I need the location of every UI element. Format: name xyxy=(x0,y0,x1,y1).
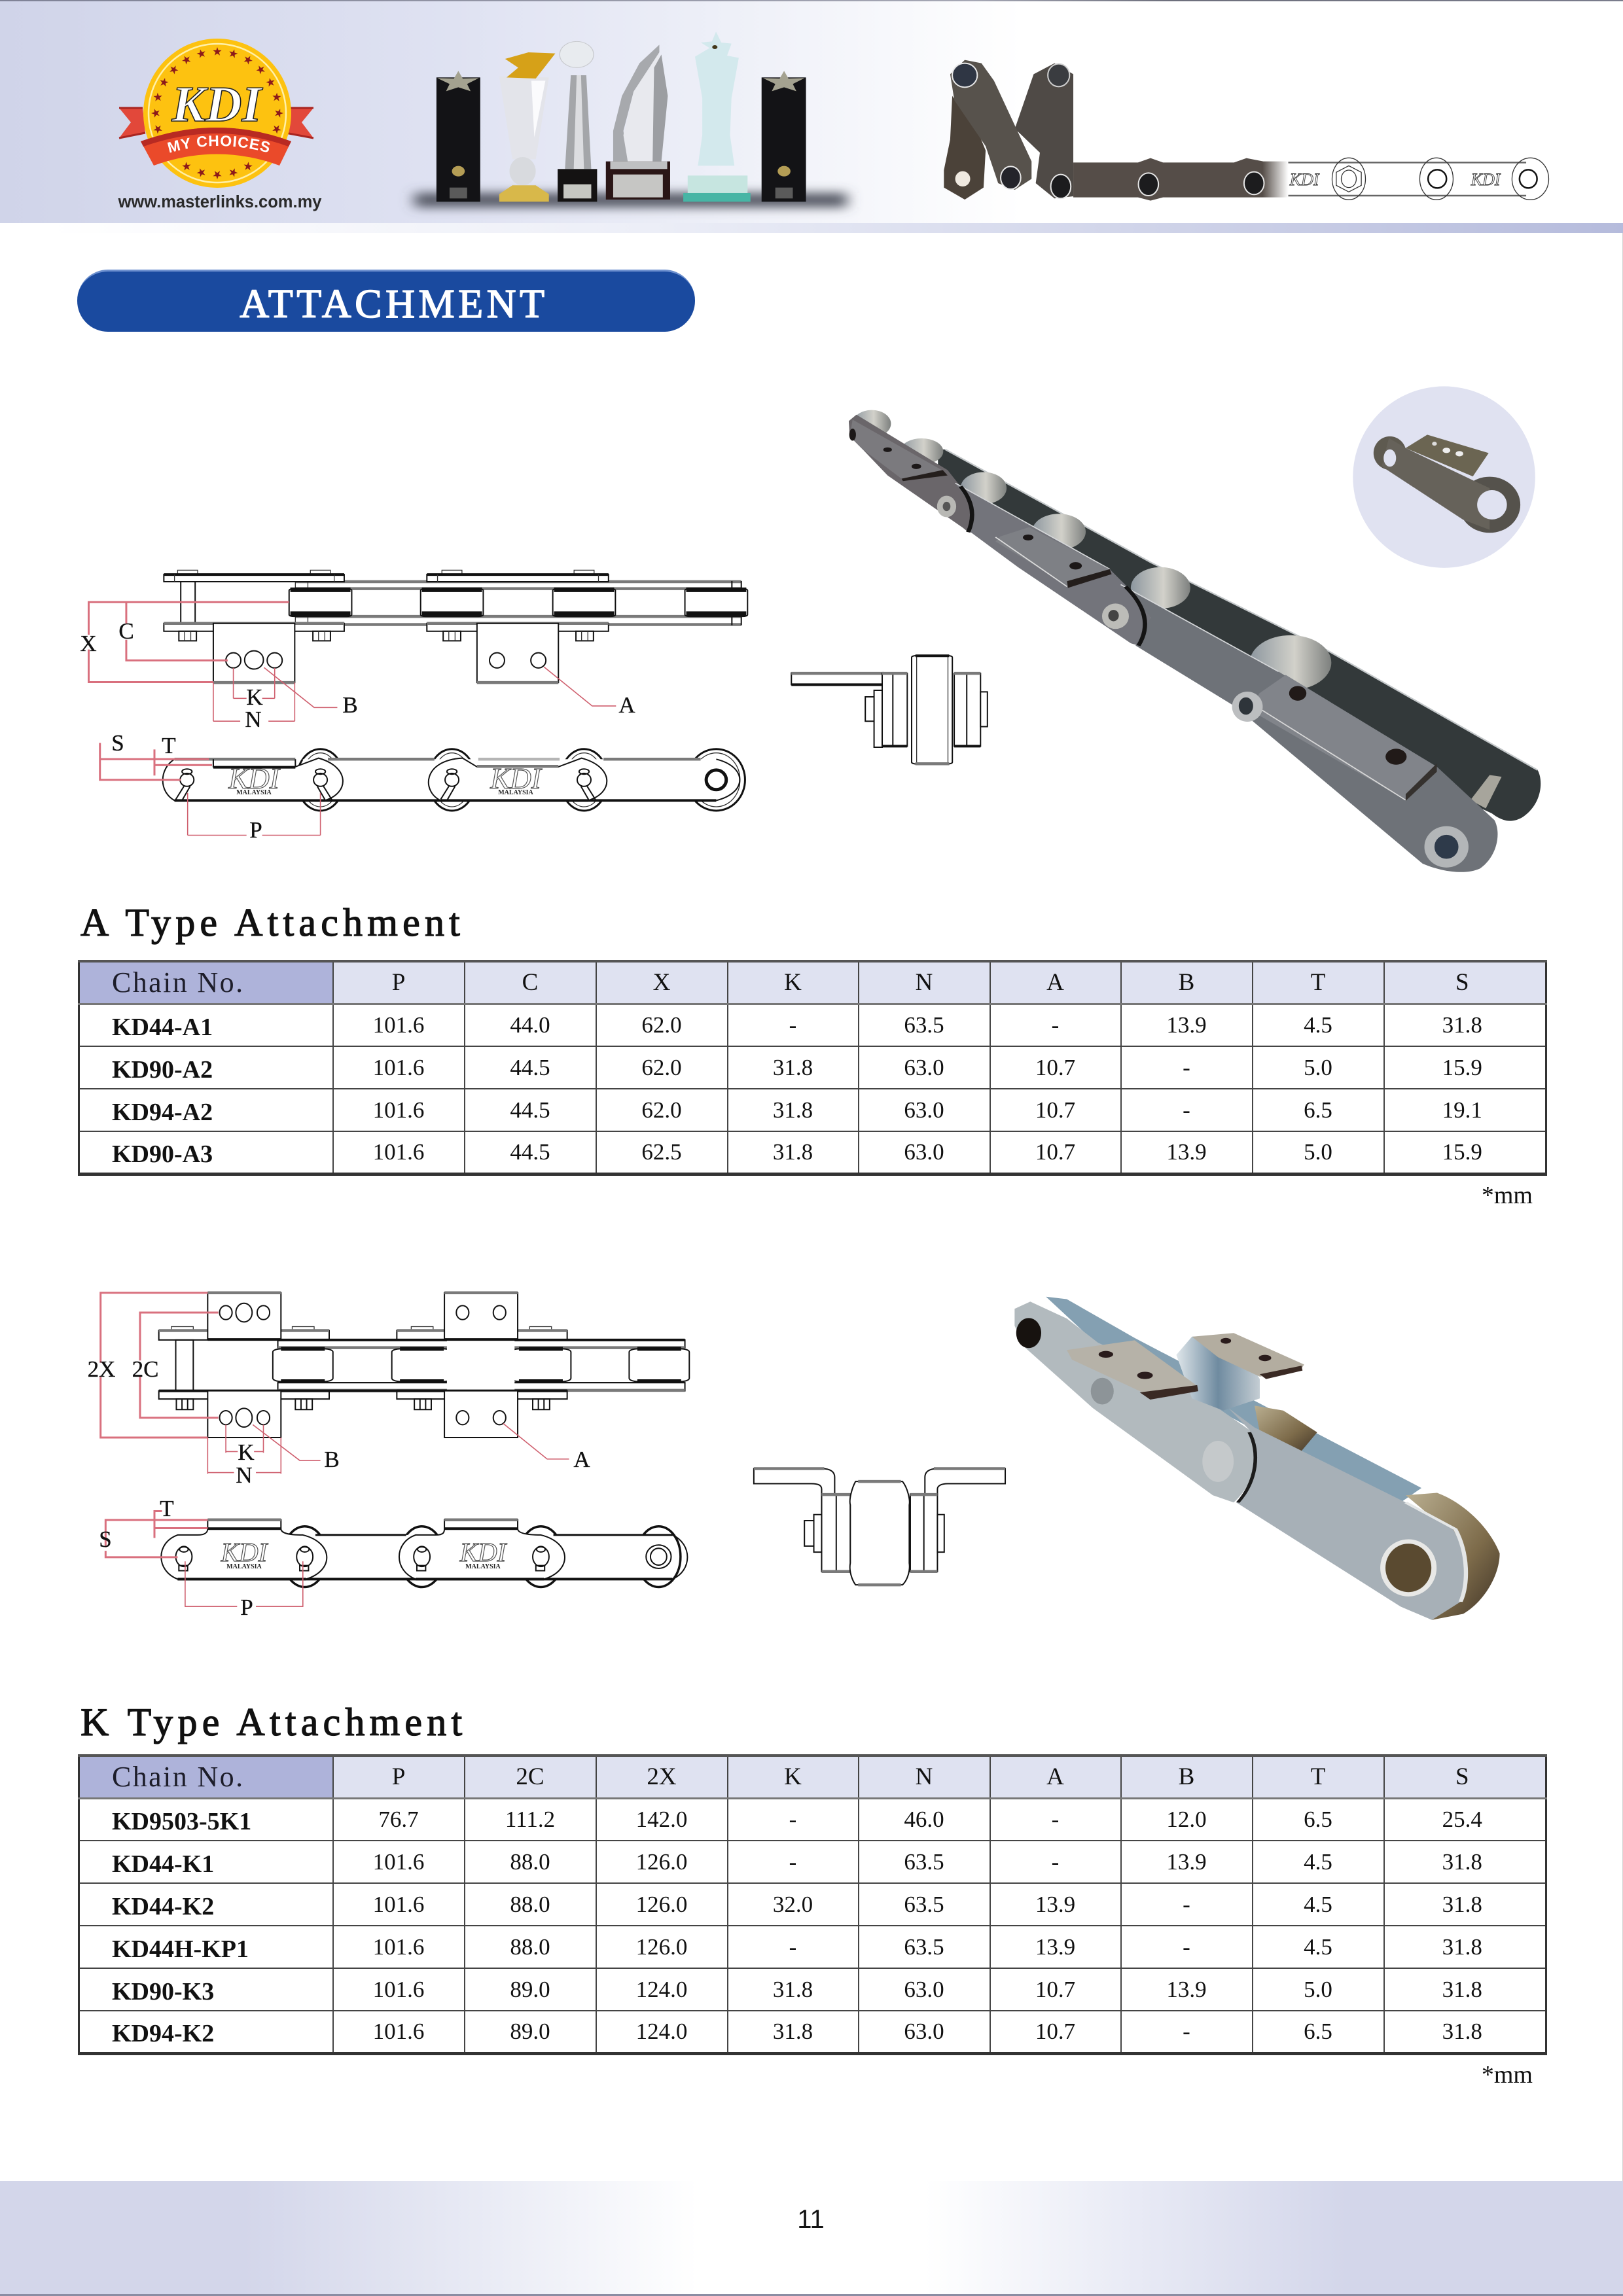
table: A type attachment: 44.5 xyxy=(510,1097,550,1123)
table: K type attachment: 4.5 xyxy=(1304,1891,1332,1917)
table: A type attachment: 6.5 xyxy=(1304,1097,1332,1123)
table: A type attachment: C xyxy=(522,969,538,996)
table: A type attachment: 31.8 xyxy=(773,1055,813,1080)
A type: plate view labels: MALAYSIA xyxy=(498,789,534,796)
K type: top view labels: A xyxy=(573,1447,590,1472)
table: K type attachment: 124.0 xyxy=(636,1976,687,2002)
table: K type attachment: 25.4 xyxy=(1442,1807,1482,1832)
A type: top view labels xyxy=(80,618,635,732)
table: K type attachment: 31.8 xyxy=(1442,2019,1482,2044)
K type: plate view labels xyxy=(99,1496,508,1620)
K type: top view labels: B xyxy=(324,1447,340,1472)
table: K type attachment: 31.8 xyxy=(1442,1976,1482,2002)
table: K type attachment: 63.0 xyxy=(904,1976,944,2002)
table: K type attachment: 31.8 xyxy=(1442,1891,1482,1917)
table: A type attachment: T xyxy=(1311,969,1325,996)
logo: KDI My Choices badge: KDI xyxy=(171,76,263,132)
table: A type attachment: A xyxy=(1046,969,1064,996)
A type: top view labels: A xyxy=(618,692,635,718)
table: K type attachment: - xyxy=(1052,1849,1059,1874)
table: A type attachment: 101.6 xyxy=(373,1139,424,1165)
table: K type attachment: 111.2 xyxy=(505,1807,555,1832)
table: K type attachment: - xyxy=(789,1807,796,1832)
table: K type attachment: - xyxy=(1052,1807,1059,1832)
table: A type attachment: 63.0 xyxy=(904,1097,944,1123)
table: A type attachment: S xyxy=(1455,969,1469,996)
page number: 11 xyxy=(797,2205,825,2234)
K type: plate view labels: P xyxy=(240,1595,253,1620)
table: A type attachment: 44.0 xyxy=(510,1012,550,1038)
table: A type attachment: 5.0 xyxy=(1304,1055,1332,1080)
table: K type attachment: 89.0 xyxy=(510,1976,550,2002)
table: A type attachment: 19.1 xyxy=(1442,1097,1482,1123)
table: K type attachment: 10.7 xyxy=(1035,1976,1075,2002)
table: A type attachment: 44.5 xyxy=(510,1055,550,1080)
table: K type attachment: 12.0 xyxy=(1166,1807,1207,1832)
table: K type attachment: 6.5 xyxy=(1304,2019,1332,2044)
header chain KDI marks xyxy=(1289,170,1501,189)
table: K type attachment: 13.9 xyxy=(1166,1976,1207,2002)
A type: top view labels: K xyxy=(246,684,263,710)
table: K type attachment: 4.5 xyxy=(1304,1934,1332,1959)
table: A type attachment: 15.9 xyxy=(1442,1139,1482,1165)
table: K type attachment: 6.5 xyxy=(1304,1807,1332,1832)
K type: plate view labels: T xyxy=(160,1496,174,1521)
table: K type attachment: N xyxy=(916,1763,933,1790)
K type: top view labels: K xyxy=(238,1439,255,1465)
table: A type attachment: KD94-A2 xyxy=(112,1098,213,1125)
table: K type attachment: 31.8 xyxy=(1442,1849,1482,1874)
table: A type attachment: 62.0 xyxy=(641,1012,682,1038)
table: K type attachment: 76.7 xyxy=(378,1807,419,1832)
table: K type attachment xyxy=(78,1754,1547,2055)
A type: plate view labels: MALAYSIA xyxy=(236,789,272,796)
table: K type attachment: A xyxy=(1046,1763,1064,1790)
table: A type attachment: 4.5 xyxy=(1304,1012,1332,1038)
table: A type attachment: 62.5 xyxy=(641,1139,682,1165)
K type: top view labels xyxy=(88,1356,590,1488)
header chain KDI marks: KDI xyxy=(1289,170,1320,189)
A type: inset part circle xyxy=(1353,386,1535,568)
table: A type attachment: - xyxy=(789,1012,796,1038)
table: K type attachment: 63.5 xyxy=(904,1934,944,1959)
K type: plate view labels: KDI xyxy=(459,1537,508,1567)
logo: KDI My Choices badge: MY CHOICES xyxy=(168,135,270,153)
table: K type attachment: 101.6 xyxy=(373,1891,424,1917)
table: A type attachment: 15.9 xyxy=(1442,1055,1482,1080)
table: A type attachment: 101.6 xyxy=(373,1097,424,1123)
table: K type attachment: B xyxy=(1179,1763,1194,1790)
table: K type attachment: Chain No. xyxy=(112,1761,244,1793)
table: K type attachment: 89.0 xyxy=(510,2019,550,2044)
K type: plate view labels: MALAYSIA xyxy=(226,1563,262,1570)
table: K type attachment: 101.6 xyxy=(373,1849,424,1874)
table: A type attachment: 5.0 xyxy=(1304,1139,1332,1165)
A type: dimension lines top view xyxy=(89,602,616,721)
table: A type attachment: KD90-A2 xyxy=(112,1056,213,1084)
table: K type attachment: KD9503-5K1 xyxy=(112,1808,251,1835)
table: A type attachment: 13.9 xyxy=(1166,1012,1207,1038)
table: K type attachment: 142.0 xyxy=(636,1807,687,1832)
K type: plate view labels: S xyxy=(99,1527,112,1552)
table: K type attachment: S xyxy=(1455,1763,1469,1790)
K type: top view labels: 2C xyxy=(132,1356,158,1382)
section title pill: ATTACHMENT xyxy=(240,282,548,327)
table: K type attachment: KD44-K1 xyxy=(112,1850,214,1878)
table: K type attachment: T xyxy=(1311,1763,1325,1790)
table: K type attachment: 63.5 xyxy=(904,1849,944,1874)
table: A type attachment: KD44-A1 xyxy=(112,1014,213,1041)
table: K type attachment: 126.0 xyxy=(636,1891,687,1917)
A type: top view drawing xyxy=(164,570,747,682)
table: A type attachment: N xyxy=(916,969,933,996)
table: K type attachment: 126.0 xyxy=(636,1934,687,1959)
table: K type attachment: - xyxy=(789,1849,796,1874)
K type: top view labels: N xyxy=(236,1462,253,1488)
table: K type attachment: - xyxy=(1183,1934,1190,1959)
table: K type attachment: 101.6 xyxy=(373,1934,424,1959)
table: K type attachment: 31.8 xyxy=(773,1976,813,2002)
table: K type attachment: K xyxy=(784,1763,802,1790)
table: K type attachment: 10.7 xyxy=(1035,2019,1075,2044)
table: A type attachment xyxy=(78,960,1547,1176)
table: K type attachment: 46.0 xyxy=(904,1807,944,1832)
table: K type attachment: 32.0 xyxy=(773,1891,813,1917)
header chain KDI marks: KDI xyxy=(1471,170,1501,189)
table: A type attachment: 31.8 xyxy=(773,1097,813,1123)
table: A type attachment: Chain No. xyxy=(112,966,244,998)
page right edge line xyxy=(1622,233,1623,2181)
table: K type attachment: 124.0 xyxy=(636,2019,687,2044)
table: A type attachment: KD90-A3 xyxy=(112,1140,213,1168)
table: K type attachment: 13.9 xyxy=(1035,1934,1075,1959)
K type: chain photo xyxy=(1014,1297,1500,1620)
table: A type attachment: X xyxy=(653,969,670,996)
table: K type attachment: 126.0 xyxy=(636,1849,687,1874)
trophies xyxy=(414,31,847,207)
header band xyxy=(0,0,1623,233)
K type: top view labels: 2X xyxy=(88,1356,115,1382)
A type: plate view labels: KDI xyxy=(490,762,543,795)
table: A type attachment: 62.0 xyxy=(641,1097,682,1123)
table: K type attachment: 63.0 xyxy=(904,2019,944,2044)
website url: www.masterlinks.com.my xyxy=(118,193,322,211)
A type: top view labels: X xyxy=(80,631,97,656)
table: K type attachment: KD44H-KP1 xyxy=(112,1935,249,1963)
table: K type attachment: 31.8 xyxy=(1442,1934,1482,1959)
K type: side view drawing xyxy=(754,1468,1005,1585)
table: A type attachment: 101.6 xyxy=(373,1012,424,1038)
table: A type attachment: 31.8 xyxy=(1442,1012,1482,1038)
A type: top view labels: B xyxy=(342,692,358,718)
table: K type attachment: 88.0 xyxy=(510,1891,550,1917)
table: K type attachment: 5.0 xyxy=(1304,1976,1332,2002)
heading: K Type Attachment: K Type Attachment xyxy=(80,1701,467,1744)
table: K type attachment: 101.6 xyxy=(373,1976,424,2002)
A type: plate view labels: S xyxy=(111,730,124,756)
table: A type attachment: 13.9 xyxy=(1166,1139,1207,1165)
header chain image xyxy=(944,60,1548,201)
A type: plate view labels: P xyxy=(249,817,262,843)
table: K type attachment: 13.9 xyxy=(1035,1891,1075,1917)
table: K type attachment: - xyxy=(789,1934,796,1959)
table: A type attachment: 10.7 xyxy=(1035,1139,1075,1165)
table: K type attachment: 101.6 xyxy=(373,2019,424,2044)
table: K type attachment: 2C xyxy=(516,1763,544,1790)
table: A type attachment: - xyxy=(1183,1097,1190,1123)
table: A type attachment: P xyxy=(392,969,405,996)
table: A type attachment: K xyxy=(784,969,802,996)
K type: plate view labels: KDI xyxy=(221,1537,269,1567)
table: K type attachment: - xyxy=(1183,2019,1190,2044)
footer band xyxy=(0,2181,1623,2296)
table: K type attachment: 2X xyxy=(647,1763,677,1790)
table: A type attachment: 63.5 xyxy=(904,1012,944,1038)
table: A type attachment: 44.5 xyxy=(510,1139,550,1165)
table: K type attachment: - xyxy=(1183,1891,1190,1917)
table: K type attachment: 88.0 xyxy=(510,1934,550,1959)
unit note A: *mm xyxy=(1482,1182,1533,1209)
heading: A Type Attachment: A Type Attachment xyxy=(80,901,465,944)
A type: chain photo xyxy=(849,410,1541,872)
unit note K: *mm xyxy=(1482,2061,1533,2089)
logo: KDI My Choices badge xyxy=(119,39,314,188)
section title pill xyxy=(77,270,695,332)
table: K type attachment: P xyxy=(392,1763,405,1790)
table: K type attachment: 63.5 xyxy=(904,1891,944,1917)
table: K type attachment: 13.9 xyxy=(1166,1849,1207,1874)
table: A type attachment: 63.0 xyxy=(904,1055,944,1080)
table: A type attachment: 10.7 xyxy=(1035,1055,1075,1080)
table: K type attachment: KD94-K2 xyxy=(112,2020,214,2047)
table: A type attachment: - xyxy=(1183,1055,1190,1080)
table: A type attachment: 101.6 xyxy=(373,1055,424,1080)
A type: plate view labels: T xyxy=(162,733,176,758)
A type: plate view labels xyxy=(111,730,543,843)
K type: plate view labels: MALAYSIA xyxy=(465,1563,501,1570)
table: K type attachment: 31.8 xyxy=(773,2019,813,2044)
A type: plate view labels: KDI xyxy=(228,762,281,795)
table: A type attachment: - xyxy=(1052,1012,1059,1038)
table: A type attachment: 62.0 xyxy=(641,1055,682,1080)
table: K type attachment: KD90-K3 xyxy=(112,1977,214,2005)
table: K type attachment: KD44-K2 xyxy=(112,1892,214,1920)
table: A type attachment: 63.0 xyxy=(904,1139,944,1165)
K type: top view drawing xyxy=(101,1293,689,1474)
table: K type attachment: 4.5 xyxy=(1304,1849,1332,1874)
table: A type attachment: B xyxy=(1179,969,1194,996)
A type: top view labels: C xyxy=(118,618,134,644)
A type: top view labels: N xyxy=(245,707,262,732)
A type: side view drawing xyxy=(791,656,988,764)
A type: plate view drawing xyxy=(100,743,745,835)
table: A type attachment: 10.7 xyxy=(1035,1097,1075,1123)
K type: plate view drawing xyxy=(105,1511,687,1607)
table: A type attachment: 31.8 xyxy=(773,1139,813,1165)
table: K type attachment: 88.0 xyxy=(510,1849,550,1874)
